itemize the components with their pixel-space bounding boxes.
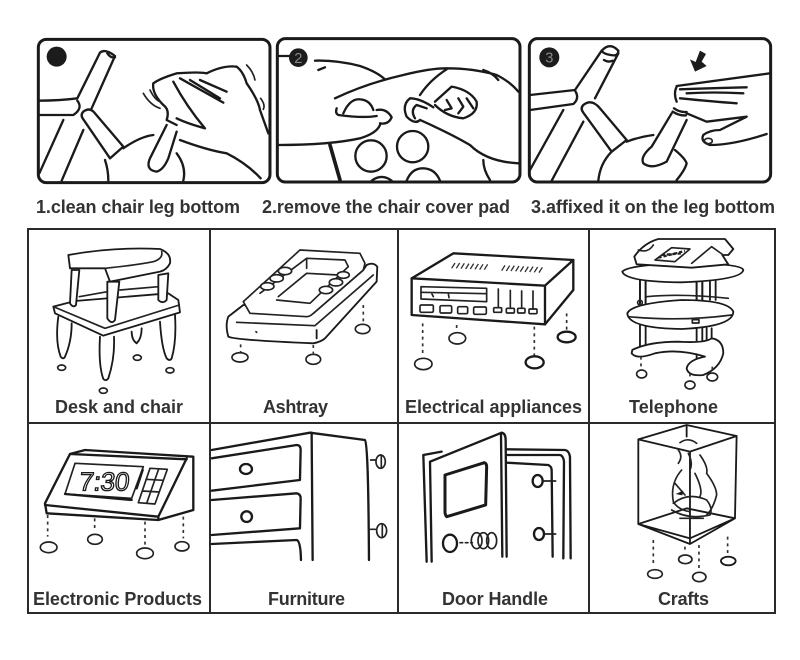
icon: door with pads	[423, 433, 571, 562]
panel: step 3	[529, 39, 775, 217]
label: telephone: Telephone	[629, 397, 718, 417]
icon: oil lamp in display case	[638, 425, 737, 582]
caption: step 1: 1.clean chair leg bottom	[36, 197, 240, 217]
illustration: cleaning the chair leg	[38, 39, 270, 183]
label: furniture: Furniture	[268, 589, 345, 609]
illustration: removing the pad: 2	[294, 51, 302, 67]
icon: digital clock	[40, 450, 193, 559]
clock readout: 7:30	[78, 467, 131, 497]
cell: telephone	[622, 239, 743, 417]
illustration: affixing the pad	[529, 39, 771, 182]
cell: door handle	[423, 433, 571, 609]
panel: step 2	[262, 39, 520, 217]
label: crafts: Crafts	[658, 589, 709, 609]
panel: step 1	[36, 39, 270, 217]
cell: ashtray	[227, 250, 377, 417]
icon: drawer cabinet	[212, 433, 387, 560]
label: electronic products: Electronic Products	[33, 589, 202, 609]
cell: furniture	[212, 433, 387, 609]
icon: ashtray	[227, 250, 377, 364]
icon: telephone on round table	[622, 239, 743, 389]
caption: step 3: 3.affixed it on the leg bottom	[531, 197, 775, 217]
grid frame: uses table	[28, 229, 775, 613]
label: ashtray: Ashtray	[263, 397, 328, 417]
illustration: affixing the pad: 3	[545, 51, 553, 67]
icon: desk and chair	[53, 248, 180, 393]
label: door handle: Door Handle	[442, 589, 548, 609]
cell: crafts	[638, 425, 737, 609]
icon: stereo box	[412, 253, 576, 370]
caption: step 2: 2.remove the chair cover pad	[262, 197, 510, 217]
cell: desk and chair	[53, 248, 183, 417]
illustration: removing the pad	[277, 39, 520, 182]
label: desk and chair: Desk and chair	[55, 397, 183, 417]
cell: electronic products	[33, 450, 202, 609]
label: electrical appliances: Electrical appliances	[405, 397, 582, 417]
cell: electrical appliances	[405, 253, 582, 417]
